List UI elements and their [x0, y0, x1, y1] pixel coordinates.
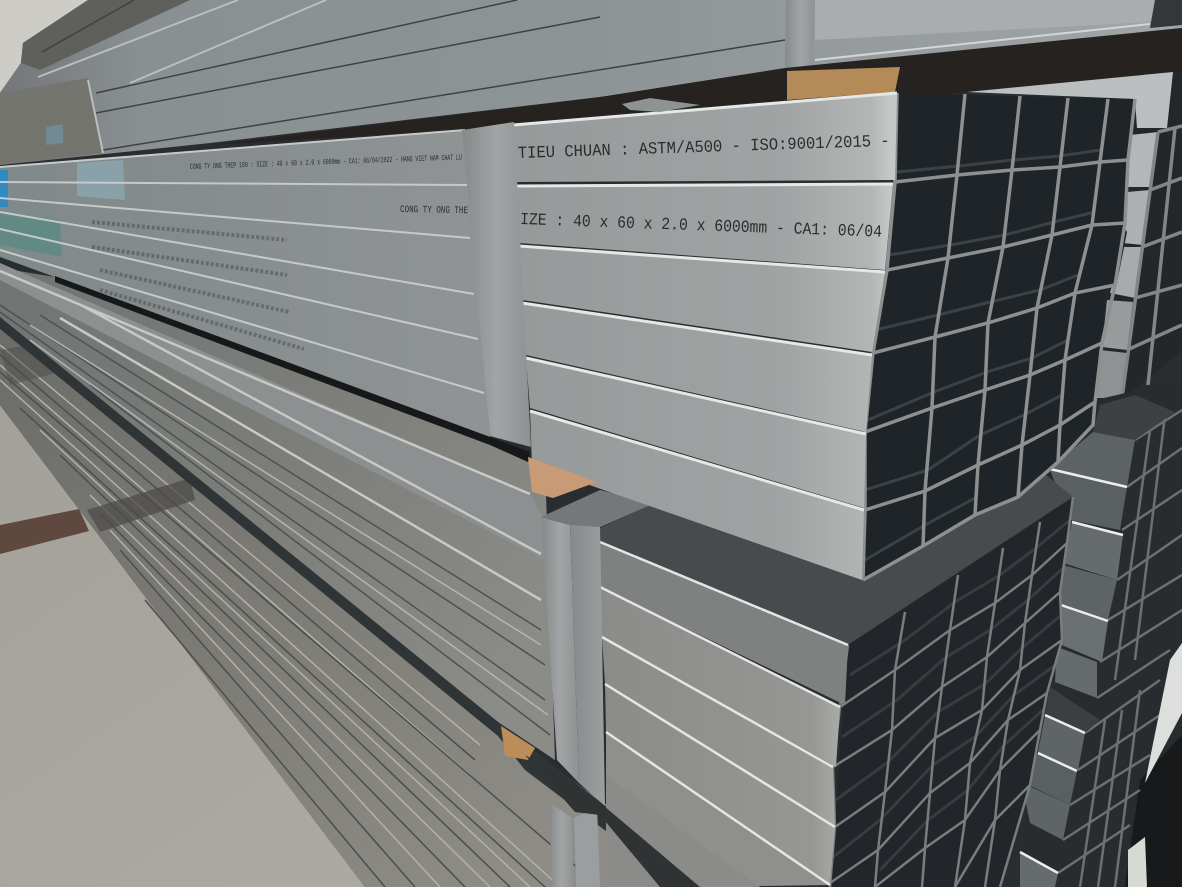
lower strap [541, 490, 655, 806]
right upper stack [967, 70, 1182, 400]
lower wooden spacer [501, 726, 535, 760]
lower bundle front openings [830, 497, 1073, 887]
strap buckle on top [622, 98, 700, 112]
upper bundle tube sides, right of strap [513, 93, 897, 580]
shadow band across tubes [0, 330, 277, 532]
brown board on floor [0, 509, 89, 554]
printed marking: size far left: CONG TY ONG THEP 190 : SIZE : 40 x 60 x 2.0 x 6000mm - CA1: 06/04/2022 - HANG VIET NAM CHAT LU [190, 154, 462, 172]
lower bundle tube sides [600, 542, 848, 887]
upper wooden spacer [528, 457, 597, 498]
bottom strap [525, 755, 700, 887]
upper bundle front openings [863, 93, 1135, 580]
second product label with green band [1128, 837, 1147, 887]
background wall corner [0, 0, 88, 93]
dark gap band between lower bundles [0, 317, 710, 887]
dark gap under upper bundle [55, 276, 530, 462]
lower bundle top surface [600, 470, 1073, 645]
printed marking: standard: TIEU CHUAN : ASTM/A500 - ISO:9001/2015 - [518, 133, 890, 164]
lowest left bundle [0, 323, 720, 887]
white product label [1145, 643, 1182, 783]
concrete floor [0, 405, 365, 887]
printed marking: size: IZE : 40 x 60 x 2.0 x 6000mm - CA1: 06/04 [520, 211, 882, 243]
wooden spacer top [787, 67, 900, 100]
printed marking: company left of strap: CONG TY ONG THE [400, 205, 468, 217]
dark gap under top bundle [210, 28, 1182, 145]
top strap [785, 0, 815, 69]
top bundle of tubes [0, 0, 1182, 165]
upper strap [462, 122, 531, 447]
right lower stack [1020, 380, 1182, 887]
lower bundle side, left of strap [0, 263, 555, 760]
upper bundle tube sides, left of strap [0, 130, 490, 437]
